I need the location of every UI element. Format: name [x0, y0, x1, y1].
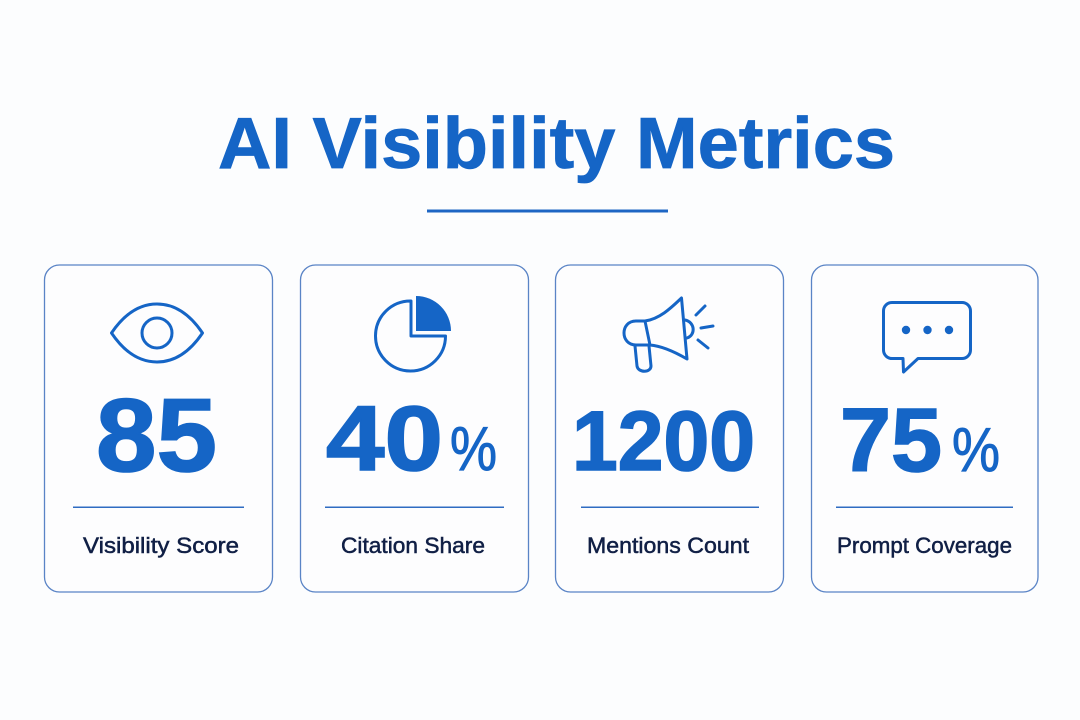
metric value: 75% [840, 391, 1000, 491]
metric value: 40%: % [450, 415, 497, 484]
panel: visibility score [44, 265, 272, 592]
divider [325, 506, 504, 508]
divider [581, 506, 759, 508]
panel: prompt coverage [812, 265, 1038, 592]
icon: pie chart [375, 296, 451, 371]
panel: citation share [300, 265, 528, 592]
icon: megaphone [624, 298, 713, 371]
icon: speech bubble [884, 302, 970, 372]
metric value: 85: 85 [96, 378, 217, 494]
label: mentions count: Mentions Count [587, 533, 750, 558]
divider [73, 506, 244, 508]
icon: eye [112, 304, 202, 362]
label: visibility score: Visibility Score [83, 533, 239, 558]
metric value: 40%: 40 [326, 388, 443, 490]
title underline [427, 210, 668, 212]
metric value: 1200: 1200 [572, 394, 755, 488]
label: prompt coverage: Prompt Coverage [837, 533, 1012, 558]
title: AI Visibility Metrics [218, 104, 895, 184]
panel: mentions count [556, 265, 784, 592]
label: citation share: Citation Share [341, 533, 485, 558]
metric value: 75%: 75 [840, 391, 942, 491]
metric value: 40% [326, 388, 497, 490]
metric value: 75%: % [952, 416, 1000, 485]
divider [836, 506, 1013, 508]
